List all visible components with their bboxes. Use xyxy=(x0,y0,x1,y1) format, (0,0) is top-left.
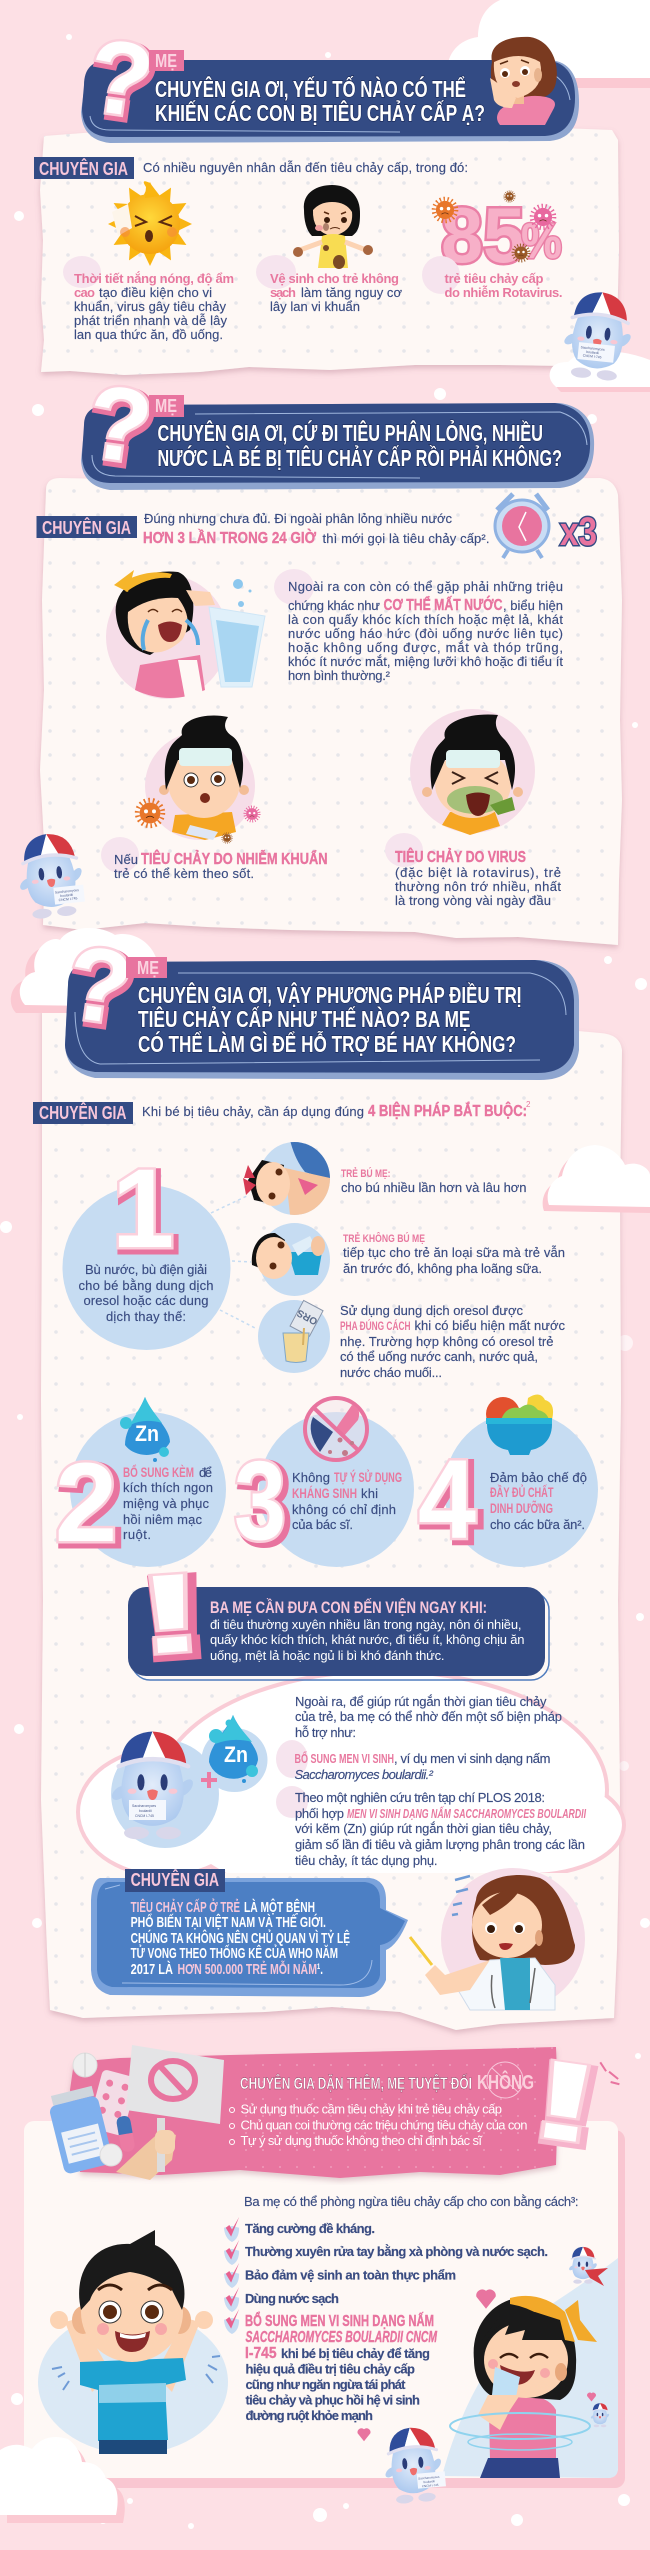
step three: no self-medicated antibiotics: 3 xyxy=(238,1441,290,1566)
prevention checklist: Dùng nước sạch xyxy=(245,2291,339,2306)
mascot with zinc: Zn xyxy=(224,1742,248,1767)
speech bubble: expert note: HƠN 500.000 TRẺ MỖI NĂM xyxy=(178,1960,317,1978)
mascot: probiotic drop two xyxy=(13,831,88,921)
illustration: vomiting boy xyxy=(410,709,535,835)
icon: oral rehydration salts xyxy=(258,1300,330,1373)
alert: when to go to hospital: uống, mệt lả hoặc ngủ li bì khó đánh thức. xyxy=(210,1648,444,1663)
bacterial infection text: trẻ có thể kèm theo sốt. xyxy=(114,866,254,881)
prevention checklist: Thường xuyên rửa tay bằng xà phòng và nước sạch. xyxy=(245,2244,548,2259)
tag: mẹ: MẸ xyxy=(137,958,159,978)
title text xyxy=(155,75,485,126)
warning banner: things to avoid: CHUYÊN GIA DẶN THÊM, MẸ TUYỆT ĐỐI xyxy=(240,2073,472,2093)
supportive measures text: , ví dụ men vi sinh dạng nấm xyxy=(394,1751,550,1766)
speech bubble: expert note: TỬ VONG THEO THỐNG KÊ CỦA WHO NĂM xyxy=(131,1944,338,1962)
icon: exclamation mark: ! xyxy=(522,2038,614,2172)
bullet list: Chủ quan coi thường các triệu chứng tiêu chảy của con xyxy=(240,2118,528,2132)
step one circle xyxy=(62,1146,230,1350)
alert: when to go to hospital: BA MẸ CẦN ĐƯA CON ĐẾN VIỆN NGAY KHI: xyxy=(210,1598,487,1617)
icon: salad bowl xyxy=(486,1394,553,1455)
step three: no self-medicated antibiotics: khi xyxy=(361,1486,378,1501)
icon: exclamation mark: ! xyxy=(131,1549,210,1678)
dehydration text: khóc ít nước mắt, miệng lưỡi khô hoặc đi tiểu ít xyxy=(288,654,563,669)
icon: alarm clock times three: x3 xyxy=(560,510,597,554)
icon: zinc drop: Zn xyxy=(135,1421,159,1446)
definition text: HƠN 3 LẦN TRONG 24 GIỜ xyxy=(143,528,316,547)
option: breastfed: TRẺ BÚ MẸ: xyxy=(341,1167,390,1180)
mascot: probiotic drop three: CNCM I-745 xyxy=(422,2483,439,2488)
alert: when to go to hospital: quấy khóc kích thích, khát nước, đi tiểu ít, không chịu ăn xyxy=(210,1632,524,1647)
cause 3: rotavirus: do nhiễm Rotavirus. xyxy=(444,285,562,300)
step four: adequate nutrition: 4 xyxy=(418,1437,476,1562)
icon: exclamation mark xyxy=(519,2034,625,2173)
cause 1: hot weather: khuẩn, virus gây tiêu chảy xyxy=(74,299,226,314)
illustration: happy girl drinking xyxy=(442,2258,618,2478)
title text xyxy=(158,418,562,471)
tag: chuyên gia: CHUYÊN GIA xyxy=(39,1102,126,1123)
icon: exclamation mark: ! xyxy=(519,2034,612,2169)
mascot: probiotic drop one xyxy=(559,289,637,383)
supportive measures text: Saccharomyces boulardii.² xyxy=(294,1767,434,1782)
step two: zinc: ruột. xyxy=(123,1527,151,1542)
option: oresol: nước cháo muối... xyxy=(340,1365,442,1380)
intro text: Khi bé bị tiêu chảy, cần áp dụng đúng xyxy=(142,1104,364,1119)
illustration: happy boy xyxy=(38,2230,228,2454)
option: oresol: nhẹ. Trường hợp không có oresol trẻ xyxy=(340,1334,554,1349)
definition text: thì mới gọi là tiêu chảy cấp². xyxy=(322,531,490,546)
warning banner: things to avoid xyxy=(46,2034,625,2180)
step one circle: oresol hoặc các dung xyxy=(84,1293,208,1308)
mascot with zinc: boulardii xyxy=(139,1809,152,1813)
cause 3: rotavirus xyxy=(422,256,562,300)
supportive measures text: Ngoài ra, để giúp rút ngắn thời gian tiêu chảy xyxy=(295,1694,547,1709)
cause 2: poor hygiene: Vệ sinh cho trẻ không xyxy=(270,271,399,286)
step two: zinc: 2 xyxy=(59,1443,121,1568)
cloud: bottom left xyxy=(0,2437,125,2523)
viral diarrhoea text: thường nôn trớ nhiều, nhất xyxy=(395,879,561,894)
step three: no self-medicated antibiotics xyxy=(234,1398,414,1567)
dehydration text: nước uống háo hức (đòi uống nước liên tục) xyxy=(288,626,563,641)
icon: exclamation mark xyxy=(131,1549,214,1682)
supportive measures text: phối hợp xyxy=(295,1806,344,1821)
intro text: Có nhiều nguyên nhân dẫn đến tiêu chảy cấp, trong đó: xyxy=(143,160,468,175)
heading banner: question two xyxy=(79,363,594,490)
stat: 85 percent with viruses xyxy=(434,191,562,279)
definition text xyxy=(143,511,490,547)
cause 1: hot weather: lan qua thức ăn, đồ uống. xyxy=(74,327,223,342)
supportive measures text: hỗ trợ như: xyxy=(295,1725,356,1740)
step one circle: dịch thay thế: xyxy=(106,1309,186,1324)
step one circle: Bù nước, bù điện giải xyxy=(85,1262,207,1277)
prevention checklist: tiêu chảy và phục hồi hệ vi sinh xyxy=(246,2392,420,2408)
step two: zinc: BỔ SUNG KÈM xyxy=(123,1463,194,1480)
supportive measures text: BỔ SUNG MEN VI SINH xyxy=(294,1751,394,1766)
icon: medicine xyxy=(46,2053,138,2175)
heading banner: question one xyxy=(81,17,579,144)
icon: worried mother xyxy=(490,37,557,125)
step three: no self-medicated antibiotics: TỰ Ý SỬ DỤNG xyxy=(334,1468,402,1485)
step three: no self-medicated antibiotics: 3 xyxy=(234,1438,286,1563)
step two: zinc: kích thích ngon xyxy=(123,1480,213,1495)
panel: prevention xyxy=(24,2121,625,2505)
step four: adequate nutrition: 4 xyxy=(422,1440,480,1565)
speech bubble: expert note: PHỔ BIẾN TẠI VIỆT NAM VÀ THẾ GIỚI. xyxy=(131,1913,326,1931)
small mascots xyxy=(568,2247,610,2427)
option: not breastfed: ăn trước đó, không pha loãng sữa. xyxy=(343,1261,542,1276)
large cloud backdrop xyxy=(76,1676,626,1873)
cloud: left behind banner three xyxy=(11,928,158,1013)
cause 2: poor hygiene: làm tăng nguy cơ xyxy=(301,285,402,300)
bullet list xyxy=(230,2102,528,2148)
panel: symptoms xyxy=(13,478,622,945)
icon: question mark: ? xyxy=(80,363,159,487)
mascot: probiotic drop two: Saccharomyces xyxy=(55,888,79,895)
option: oresol: khi có biểu hiện mất nước xyxy=(414,1318,566,1333)
viral diarrhoea text xyxy=(385,833,561,908)
icon: sun with tissue xyxy=(108,181,192,266)
mascot with zinc: Saccharomyces xyxy=(132,1804,156,1808)
speech bubble: expert note: ¹. xyxy=(317,1961,323,1978)
prevention checklist: SACCHAROMYCES BOULARDII CNCM xyxy=(246,2329,437,2346)
prevention intro text: Ba mẹ có thể phòng ngừa tiêu chảy cấp cho con bằng cách³: xyxy=(244,2194,578,2209)
mascot: probiotic drop one: CNCM I-745 xyxy=(583,354,602,359)
cause 2: poor hygiene: lây lan vi khuẩn xyxy=(270,299,360,314)
option: oresol xyxy=(340,1303,566,1380)
dehydration text xyxy=(274,569,563,683)
icons: hearts xyxy=(358,2289,596,2441)
step four: adequate nutrition: ĐẦY ĐỦ CHẤT xyxy=(490,1483,554,1500)
definition text: Đúng nhưng chưa đủ. Đi ngoài phân lỏng nhiều nước xyxy=(144,511,452,526)
cause 1: hot weather: cao xyxy=(74,285,95,300)
icon: zinc drop xyxy=(120,1397,170,1462)
illustration: feverish boy xyxy=(137,716,259,843)
cause 2: poor hygiene xyxy=(256,255,402,314)
prevention checklist: cũng như ngăn ngừa tái phát xyxy=(246,2377,406,2392)
option: breastfed xyxy=(341,1167,526,1195)
speech bubble: expert note: LÀ MỘT BỆNH xyxy=(244,1898,315,1916)
prevention checklist xyxy=(224,2217,548,2423)
dehydration text: là con quấy khóc kích thích hoặc mệt lả, khát xyxy=(288,612,563,627)
speech bubble: expert note: CHÚNG TA KHÔNG NÊN CHỦ QUAN VÌ TỶ LỆ xyxy=(131,1929,350,1947)
icon: alarm clock times three xyxy=(495,494,597,558)
supportive measures text: giảm số lần đi tiêu và giảm lượng phân trong các lần xyxy=(295,1837,585,1852)
dehydration text: Ngoài ra con còn có thể gặp phải những triệu xyxy=(288,579,563,594)
step one circle: cho bé bằng dung dịch xyxy=(78,1278,214,1293)
supportive measures text: với kẽm (Zn) giúp rút ngắn thời gian tiêu chảy, xyxy=(295,1821,552,1836)
tag: chuyên gia: CHUYÊN GIA xyxy=(42,517,131,538)
cause 1: hot weather: phát triển nhanh và dễ lây xyxy=(74,313,228,328)
option: not breastfed: tiếp tục cho trẻ ăn loại sữa mà trẻ vẫn xyxy=(343,1245,565,1260)
bacterial infection text xyxy=(101,837,328,881)
cloud: top right xyxy=(447,0,650,88)
prevention checklist: khi bé bị tiêu chảy để tăng xyxy=(281,2346,430,2361)
intro text: 4 BIỆN PHÁP BẮT BUỘC: xyxy=(368,1101,527,1120)
step four: adequate nutrition: DINH DƯỠNG xyxy=(490,1499,553,1516)
dehydration text: chứng khác như xyxy=(288,598,380,613)
icon: dirty girl xyxy=(293,185,373,269)
dehydration text: hoặc không uống được, mắt và thóp trũng, xyxy=(288,640,563,655)
supportive measures text: của trẻ, ba mẹ có thể nhờ đến một số biện pháp xyxy=(295,1709,562,1724)
panel: causes of acute diarrhoea xyxy=(34,128,650,392)
mascot: probiotic drop two: CNCM I-745 xyxy=(58,896,78,902)
viral diarrhoea text: là trong vòng vài ngày đầu xyxy=(395,893,551,908)
title text: TIÊU CHẢY CẤP NHƯ THẾ NÀO? BA MẸ xyxy=(138,1004,470,1032)
stat: 85 percent with viruses: 85 xyxy=(441,191,525,279)
warning banner: things to avoid: KHÔNG xyxy=(477,2070,534,2094)
cause 1: hot weather: Thời tiết nắng nóng, độ ẩm xyxy=(74,271,234,286)
supportive measures text: tiêu chảy, ít tác dụng phụ. xyxy=(295,1853,438,1868)
icon: bottle-fed baby xyxy=(252,1223,330,1296)
speech bubble: expert note xyxy=(91,1869,408,1997)
speech bubble: expert note: 2017 LÀ xyxy=(131,1961,173,1978)
tag: mẹ: MẸ xyxy=(155,51,177,71)
alert: when to go to hospital: đi tiêu thường xuyên nhiều lần trong ngày, nôn ói nhiều, xyxy=(210,1617,522,1632)
supportive measures text xyxy=(276,1694,586,1868)
icon: question mark: ? xyxy=(60,924,139,1048)
mascot: probiotic drop one: boulardii xyxy=(586,350,599,355)
icon: prohibition sign held by hand xyxy=(116,2045,224,2180)
speech bubble: expert note: TIÊU CHẢY CẤP Ở TRẺ xyxy=(131,1898,240,1916)
icon: question mark: ? xyxy=(82,366,161,490)
icon: question mark: ? xyxy=(62,927,141,1051)
cloud: right of panel one xyxy=(550,352,650,392)
step two: zinc: 2 xyxy=(55,1440,117,1565)
option: not breastfed: TRẺ KHÔNG BÚ MẸ xyxy=(343,1232,425,1245)
icon: question mark: ? xyxy=(84,20,163,144)
cloud: right of treatment panel xyxy=(543,1145,650,1213)
mascot: probiotic drop three xyxy=(380,2425,447,2505)
cause 2: poor hygiene: sạch xyxy=(270,285,296,300)
title text: CÓ THỂ LÀM GÌ ĐỂ HỖ TRỢ BÉ HAY KHÔNG? xyxy=(138,1029,516,1057)
mascot: probiotic drop one: Saccharomyces xyxy=(580,345,605,352)
mascot: probiotic drop two: boulardii xyxy=(60,893,73,898)
step two: zinc: hồi niêm mạc xyxy=(123,1512,202,1527)
viral diarrhoea text: (đặc biệt là rotavirus), trẻ xyxy=(395,865,561,880)
step two: zinc: để xyxy=(199,1465,212,1480)
tag: chuyên gia: CHUYÊN GIA xyxy=(39,158,128,179)
cause 1: hot weather: tạo điều kiện cho vi xyxy=(99,285,212,300)
tag: mẹ: MẸ xyxy=(155,396,177,416)
mascot: probiotic drop three: boulardii xyxy=(423,2479,435,2484)
step three: no self-medicated antibiotics: không có chỉ định xyxy=(292,1502,396,1517)
mascot: probiotic drop three: Saccharomyces xyxy=(418,2475,440,2481)
tag: mẹ xyxy=(126,957,167,978)
prevention checklist: đường ruột khỏe mạnh xyxy=(246,2408,373,2423)
icon: oral rehydration salts: ORS xyxy=(295,1307,320,1327)
bacterial infection text: Nếu xyxy=(114,852,138,867)
illustration: crying girl with water xyxy=(106,570,265,699)
prevention checklist: hiệu quả điều trị tiêu chảy cấp xyxy=(246,2362,415,2376)
step four: adequate nutrition xyxy=(418,1394,598,1567)
step three: no self-medicated antibiotics: của bác sĩ. xyxy=(292,1517,353,1532)
title text: CHUYÊN GIA ƠI, YẾU TỐ NÀO CÓ THỂ xyxy=(155,75,466,102)
option: not breastfed xyxy=(343,1232,565,1276)
step two: zinc: miệng và phục xyxy=(123,1496,210,1511)
prevention checklist: I-745 xyxy=(245,2345,277,2362)
step three: no self-medicated antibiotics: KHÁNG SINH xyxy=(292,1485,357,1501)
prevention checklist: Bảo đảm vệ sinh an toàn thực phẩm xyxy=(245,2268,456,2282)
bullet list: Tự ý sử dụng thuốc không theo chỉ định bác sĩ xyxy=(240,2133,483,2148)
illustration: doctor xyxy=(410,1868,585,2010)
prevention checklist: Tăng cường đề kháng. xyxy=(245,2221,375,2236)
prevention checklist: BỔ SUNG MEN VI SINH DẠNG NẤM xyxy=(245,2311,434,2330)
alert: when to go to hospital xyxy=(128,1549,549,1682)
step four: adequate nutrition: Đảm bảo chế độ xyxy=(490,1470,587,1485)
title text: KHIẾN CÁC CON BỊ TIÊU CHẢY CẤP Ạ? xyxy=(155,98,485,126)
tag: chuyên gia: CHUYÊN GIA xyxy=(131,1869,219,1890)
option: oresol: Sử dụng dung dịch oresol được xyxy=(340,1303,524,1318)
option: oresol: PHA ĐÚNG CÁCH xyxy=(340,1318,410,1333)
intro text xyxy=(142,1100,531,1120)
supportive measures text: Theo một nghiên cứu trên tạp chí PLOS 2018: xyxy=(295,1790,545,1805)
step three: no self-medicated antibiotics: Không xyxy=(292,1470,330,1485)
cause 1: hot weather xyxy=(63,256,234,342)
dehydration text: CƠ THỂ MẤT NƯỚC xyxy=(384,595,503,614)
step four: adequate nutrition: cho các bữa ăn². xyxy=(490,1517,585,1532)
intro text: 2 xyxy=(526,1100,531,1109)
viral diarrhoea text: TIÊU CHẢY DO VIRUS xyxy=(395,847,526,866)
dehydration text: , biểu hiện xyxy=(503,598,563,613)
bacterial infection text: TIÊU CHẢY DO NHIỄM KHUẨN xyxy=(141,849,328,868)
cause 3: rotavirus: trẻ tiêu chảy cấp xyxy=(444,271,544,286)
step two: zinc xyxy=(55,1397,226,1568)
option: breastfed: cho bú nhiều lần hơn và lâu hơn xyxy=(341,1180,526,1195)
step one circle: 1 xyxy=(112,1146,174,1271)
panel: treatment xyxy=(11,928,650,2030)
heading banner: question three xyxy=(59,924,579,1080)
icon: exclamation mark: ! xyxy=(136,1553,214,1682)
icon: no pills xyxy=(305,1398,367,1460)
mascot with zinc xyxy=(109,1715,268,1848)
icon: question mark: ? xyxy=(81,17,160,141)
stat: 85 percent with viruses: % xyxy=(521,213,562,269)
bullet list: Sử dụng thuốc cầm tiêu chảy khi trẻ tiêu chảy cấp xyxy=(240,2102,502,2116)
icon: breastfed baby xyxy=(243,1140,330,1215)
dehydration text: hơn bình thường.² xyxy=(288,668,391,683)
option: oresol: có thể uống nước canh, nước quả, xyxy=(340,1349,538,1364)
step one circle: 1 xyxy=(115,1149,177,1274)
mascot with zinc: CNCM I-745 xyxy=(135,1814,154,1818)
title text xyxy=(138,981,522,1057)
